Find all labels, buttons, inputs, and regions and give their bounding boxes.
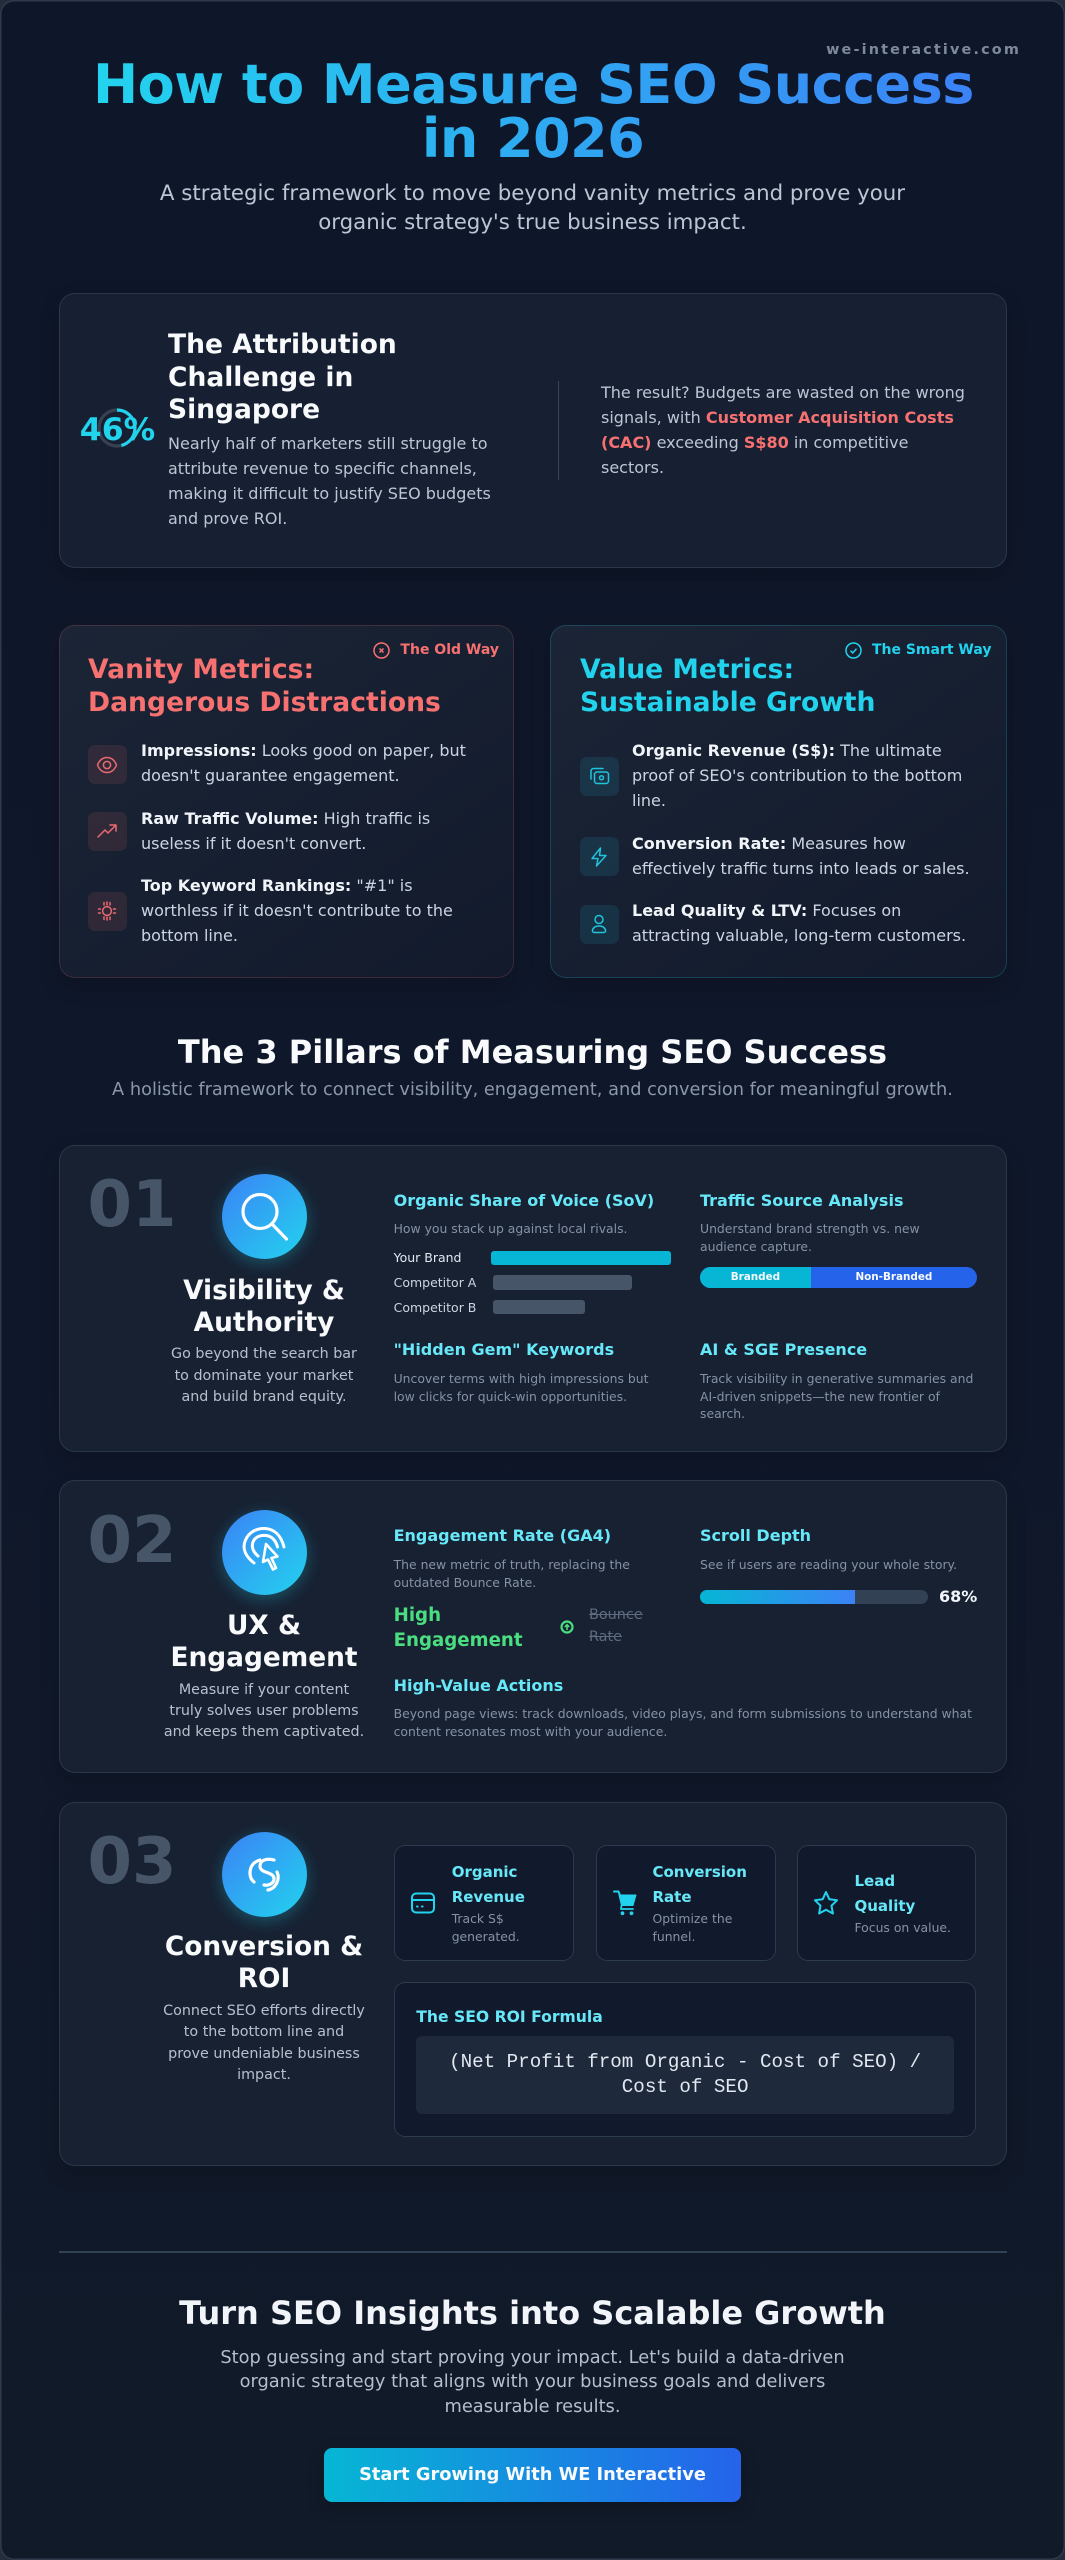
pillar description bbox=[164, 1682, 364, 1740]
label: competitor a: Competitor A bbox=[394, 1275, 476, 1290]
segment: branded bbox=[700, 1267, 811, 1288]
metric: high-value actions text: content resonates most with your audience. bbox=[394, 1724, 667, 1739]
card text: Optimize the bbox=[652, 1911, 732, 1926]
call to action text: measurable results. bbox=[445, 2396, 620, 2417]
item: organic revenue: Organic Revenue (S$): The ultimate bbox=[632, 741, 942, 760]
card title: Revenue bbox=[452, 1888, 525, 1906]
metric: hidden gem title: "Hidden Gem" Keywords bbox=[394, 1340, 614, 1359]
metric: ai presence text: Track visibility in generative summaries and bbox=[700, 1371, 973, 1386]
icon: eye bbox=[88, 745, 126, 784]
metric: traffic source text: audience capture. bbox=[700, 1239, 812, 1254]
bar: competitor b bbox=[493, 1300, 585, 1314]
bar: your brand bbox=[491, 1251, 671, 1265]
card title bbox=[452, 1863, 525, 1906]
item: impressions: Impressions: Looks good on paper, but bbox=[141, 741, 466, 760]
card title bbox=[652, 1863, 747, 1906]
icon: light bulb bbox=[88, 892, 126, 931]
item: conversion rate bbox=[632, 834, 970, 878]
item: impressions bbox=[141, 741, 466, 785]
card title: Rate bbox=[652, 1888, 692, 1906]
metric: ai presence text: search. bbox=[700, 1406, 745, 1421]
subheading: three pillars: A holistic framework to connect visibility, engagement, and conversion for meaningful growth. bbox=[112, 1080, 953, 1100]
pillar title: UX & bbox=[227, 1610, 301, 1641]
progress bar: scroll depth bbox=[700, 1590, 928, 1604]
call to action button: Start Growing With WE Interactive bbox=[359, 2464, 706, 2485]
formula box: Cost of SEO bbox=[622, 2076, 748, 2098]
formula box bbox=[416, 2036, 954, 2114]
segment: non-branded: Non-Branded bbox=[855, 1271, 932, 1283]
card: organic revenue bbox=[394, 1845, 574, 1961]
pillar description bbox=[171, 1346, 357, 1405]
card title: Lead bbox=[854, 1872, 895, 1890]
number 02: 02 bbox=[88, 1504, 177, 1578]
label: high engagement: High bbox=[394, 1604, 441, 1626]
card text: Focus on value. bbox=[854, 1920, 951, 1935]
heading: attribution challenge: The Attribution bbox=[168, 329, 397, 360]
stat: 46%: 46% bbox=[80, 412, 155, 448]
pillar title: Engagement bbox=[170, 1642, 358, 1673]
item: top keyword rankings: bottom line. bbox=[141, 926, 238, 945]
card text: generated. bbox=[452, 1929, 520, 1944]
pillar description: and build brand equity. bbox=[181, 1389, 346, 1405]
metric: scroll depth text: See if users are reading your whole story. bbox=[700, 1557, 957, 1572]
item: impressions: doesn't guarantee engagement. bbox=[141, 766, 400, 785]
text: the result: (CAC) exceeding S$80 in competitive bbox=[601, 433, 908, 452]
heading: value metrics: Value Metrics: bbox=[580, 654, 794, 685]
stacked bar: branded vs non-branded bbox=[700, 1267, 977, 1288]
heading: attribution challenge bbox=[168, 329, 397, 425]
icon: trending up bbox=[88, 812, 126, 851]
card title bbox=[854, 1872, 915, 1915]
pillar description: truly solves user problems bbox=[169, 1703, 359, 1719]
subtitle bbox=[160, 181, 905, 234]
heading: attribution challenge: Singapore bbox=[168, 394, 320, 425]
metric: share of voice title: Organic Share of Voice (SoV) bbox=[394, 1191, 654, 1210]
card title: Quality bbox=[854, 1897, 915, 1915]
label: bounce rate struck through: Rate bbox=[589, 1629, 622, 1645]
panel: attribution challenge bbox=[59, 293, 1007, 568]
metric: high-value actions text bbox=[394, 1706, 972, 1739]
icon: dollar cycle bbox=[222, 1832, 306, 1916]
label: bounce rate struck through: Bounce bbox=[589, 1607, 643, 1623]
pillar description: impact. bbox=[237, 2067, 291, 2083]
segment: branded: Branded bbox=[731, 1271, 780, 1283]
heading: three pillars: The 3 Pillars of Measuring SEO Success bbox=[178, 1033, 887, 1071]
item: lead quality bbox=[632, 901, 966, 945]
metric: share of voice text: How you stack up against local rivals. bbox=[394, 1221, 627, 1236]
pillar title bbox=[165, 1931, 363, 1994]
label: high engagement: Engagement bbox=[394, 1630, 523, 1650]
heading: value metrics bbox=[580, 654, 875, 718]
call to action heading: Turn SEO Insights into Scalable Growth bbox=[179, 2294, 886, 2332]
formula heading: The SEO ROI Formula bbox=[416, 2008, 603, 2026]
card text: Track S$ bbox=[452, 1911, 504, 1926]
pillar description: and keeps them captivated. bbox=[164, 1724, 364, 1740]
panel: pillar 01 visibility bbox=[59, 1145, 1007, 1452]
icon: user bbox=[580, 905, 618, 944]
label: high engagement bbox=[394, 1604, 523, 1650]
card: conversion rate bbox=[596, 1845, 776, 1961]
text: attribution problem: Nearly half of marketers still struggle to bbox=[168, 434, 488, 453]
text: the result: sectors. bbox=[601, 458, 664, 477]
icon: shopping cart bbox=[613, 1890, 636, 1916]
card title: Conversion bbox=[652, 1863, 747, 1881]
label: bounce rate struck through bbox=[589, 1607, 643, 1645]
metric: ai presence text: AI-driven snippets—the new frontier of bbox=[700, 1389, 940, 1404]
item: raw traffic volume: Raw Traffic Volume: High traffic is bbox=[141, 809, 430, 828]
item: top keyword rankings bbox=[141, 876, 453, 945]
metric: ai presence text bbox=[700, 1371, 973, 1421]
text: attribution problem: making it difficult to justify SEO budgets bbox=[168, 484, 491, 503]
metric: traffic source text bbox=[700, 1221, 920, 1254]
metric: hidden gem text bbox=[394, 1371, 648, 1404]
metric: hidden gem text: Uncover terms with high impressions but bbox=[394, 1371, 648, 1386]
label: competitor b: Competitor B bbox=[394, 1300, 476, 1315]
metric: ai presence title: AI & SGE Presence bbox=[700, 1340, 867, 1359]
text: the result bbox=[600, 383, 965, 477]
heading: vanity metrics: Dangerous Distractions bbox=[88, 686, 441, 718]
brand url: we-interactive.com bbox=[826, 42, 1021, 58]
label: your brand: Your Brand bbox=[394, 1250, 461, 1265]
pillar description: Connect SEO efforts directly bbox=[163, 2003, 365, 2019]
heading: value metrics: Sustainable Growth bbox=[580, 686, 875, 718]
value: 68 percent: 68% bbox=[939, 1587, 977, 1606]
heading: vanity metrics bbox=[88, 654, 441, 718]
icon: search bbox=[222, 1174, 306, 1259]
subtitle: A strategic framework to move beyond vanity metrics and prove your bbox=[160, 181, 905, 206]
text: attribution problem bbox=[168, 434, 491, 528]
icon: click ripple bbox=[222, 1510, 306, 1595]
card text: funnel. bbox=[652, 1929, 695, 1944]
metric: hidden gem text: low clicks for quick-win opportunities. bbox=[394, 1389, 627, 1404]
pillar title: ROI bbox=[238, 1963, 290, 1994]
call to action button bbox=[324, 2448, 741, 2502]
number 03: 03 bbox=[88, 1825, 177, 1899]
icon: star bbox=[814, 1891, 838, 1914]
icon: cash bbox=[580, 757, 618, 796]
metric: traffic source text: Understand brand strength vs. new bbox=[700, 1221, 920, 1236]
pillar title: Conversion & bbox=[165, 1931, 363, 1962]
item: organic revenue: line. bbox=[632, 791, 666, 810]
text: attribution problem: attribute revenue to specific channels, bbox=[168, 459, 477, 478]
heading: attribution challenge: Challenge in bbox=[168, 362, 353, 392]
item: top keyword rankings: Top Keyword Rankings: "#1" is bbox=[141, 876, 413, 895]
item: top keyword rankings: worthless if it doesn't contribute to the bbox=[141, 901, 453, 920]
pillar description: to the bottom line and bbox=[184, 2024, 344, 2040]
heading: vanity metrics: Vanity Metrics: bbox=[88, 654, 314, 685]
item: organic revenue: proof of SEO's contribution to the bottom bbox=[632, 766, 962, 785]
card text bbox=[652, 1911, 732, 1944]
pillar description: Go beyond the search bar bbox=[171, 1346, 357, 1362]
title: How to Measure SEO Success bbox=[93, 53, 974, 116]
panel: pillar 02 ux bbox=[59, 1480, 1007, 1773]
title: in 2026 bbox=[422, 107, 644, 170]
panel: value metrics bbox=[550, 625, 1006, 978]
icon: up arrow bbox=[560, 1620, 574, 1634]
pillar description: to dominate your market bbox=[175, 1368, 353, 1384]
pillar description: Measure if your content bbox=[179, 1682, 349, 1698]
pillar description bbox=[163, 2003, 365, 2083]
number 01: 01 bbox=[88, 1168, 177, 1242]
formula box: (Net Profit from Organic - Cost of SEO) / bbox=[449, 2051, 921, 2073]
metric: high-value actions title: High-Value Actions bbox=[394, 1676, 563, 1695]
pillar title: Authority bbox=[194, 1306, 334, 1338]
bar: competitor a bbox=[493, 1275, 632, 1290]
call to action text bbox=[220, 2346, 845, 2417]
panel: pillar 03 conversion bbox=[59, 1802, 1007, 2166]
item: raw traffic volume: useless if it doesn't convert. bbox=[141, 834, 366, 853]
pillar title bbox=[170, 1610, 358, 1673]
icon: credit card bbox=[411, 1892, 435, 1914]
panel: vanity metrics bbox=[59, 625, 514, 978]
metric: scroll depth title: Scroll Depth bbox=[700, 1526, 811, 1545]
item: lead quality: attracting valuable, long-term customers. bbox=[632, 926, 966, 945]
pillar description: prove undeniable business bbox=[168, 2046, 360, 2062]
text: the result: signals, with Customer Acquisition Costs bbox=[601, 408, 954, 427]
title bbox=[93, 58, 973, 166]
progress fill 68 percent bbox=[700, 1590, 855, 1604]
card text bbox=[452, 1911, 520, 1944]
text: attribution problem: and prove ROI. bbox=[168, 509, 287, 528]
panel: roi formula bbox=[394, 1982, 976, 2137]
call to action text: Stop guessing and start proving your impact. Let's build a data-driven bbox=[220, 2346, 845, 2368]
item: conversion rate: effectively traffic turns into leads or sales. bbox=[632, 859, 970, 878]
badge: the old way: The Old Way bbox=[400, 642, 499, 658]
metric: traffic source title: Traffic Source Analysis bbox=[700, 1191, 903, 1210]
icon: lightning bolt bbox=[580, 837, 618, 876]
text: the result: The result? Budgets are wasted on the wrong bbox=[601, 383, 965, 402]
item: organic revenue bbox=[632, 741, 962, 810]
metric: high-value actions text: Beyond page views: track downloads, video plays, and form submissions to understand what bbox=[394, 1706, 972, 1721]
badge: the smart way: The Smart Way bbox=[872, 642, 992, 658]
item: lead quality: Lead Quality & LTV: Focuses on bbox=[632, 901, 901, 920]
metric: engagement rate title: Engagement Rate (GA4) bbox=[394, 1526, 611, 1545]
card title: Organic bbox=[452, 1863, 517, 1881]
metric: engagement rate text: The new metric of truth, replacing the bbox=[394, 1557, 630, 1572]
item: raw traffic volume bbox=[141, 809, 430, 853]
metric: engagement rate text: outdated Bounce Rate. bbox=[394, 1575, 536, 1590]
subtitle: organic strategy's true business impact. bbox=[318, 210, 747, 234]
metric: engagement rate text bbox=[394, 1557, 630, 1590]
pillar title: Visibility & bbox=[183, 1274, 345, 1306]
card: lead quality bbox=[797, 1845, 976, 1961]
pillar title bbox=[183, 1274, 345, 1338]
icon: 46 percent ring bbox=[98, 408, 137, 448]
item: conversion rate: Conversion Rate: Measures how bbox=[632, 834, 906, 853]
call to action text: organic strategy that aligns with your business goals and delivers bbox=[240, 2371, 825, 2392]
bar chart: share of voice bbox=[394, 1250, 671, 1315]
